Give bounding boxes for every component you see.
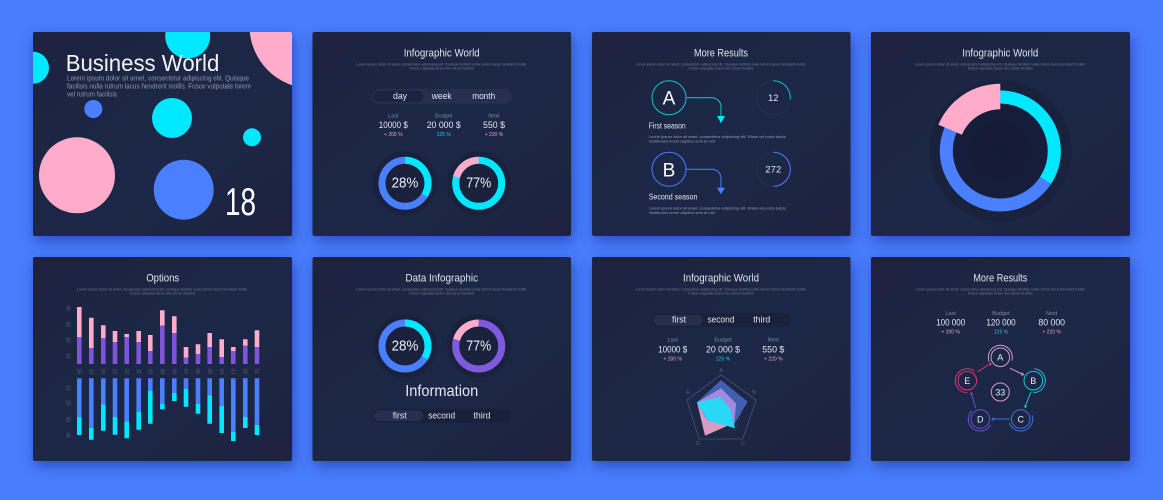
second season text: Lorem ipsum dolor sit amet, consectetur adipiscing elit. Etiam vel porta turpis. bbox=[649, 205, 787, 210]
heading: Infographic World bbox=[962, 48, 1038, 60]
panel background bbox=[871, 32, 1130, 236]
stat: last: Last bbox=[388, 113, 399, 119]
period tabs: week bbox=[431, 91, 452, 102]
category labels: 07 bbox=[182, 369, 188, 374]
first season text: Lorem ipsum dolor sit amet, consectetur adipiscing elit. Etiam vel porta turpis. bbox=[649, 134, 787, 139]
stat: last: 100 000 bbox=[936, 318, 965, 329]
stat: budget: 20 000 $ bbox=[427, 120, 461, 131]
stat: next: Next bbox=[768, 338, 779, 344]
upper axis labels: 40 bbox=[64, 305, 70, 311]
option tabs: first bbox=[672, 314, 686, 325]
stat: next: + 220 % bbox=[1042, 329, 1061, 335]
gauge 12 bbox=[756, 81, 790, 115]
panel: More Results seasons bbox=[592, 32, 850, 236]
category labels: 11 bbox=[135, 369, 141, 374]
badge A bbox=[652, 81, 686, 115]
first season text: First season bbox=[649, 121, 686, 130]
intro text: Lorem ipsum dolor sit amet, consectetur adipiscing elit. Quisque facilisis nulla rutrum lacus hendrerit mollis. bbox=[356, 61, 527, 66]
upper axis labels: 20 bbox=[64, 337, 70, 343]
upper stacked bars bbox=[79, 307, 257, 364]
lower axis labels bbox=[64, 385, 70, 438]
intro text: Fusce vulputate lorem vel rutrum facilisis bbox=[688, 291, 754, 296]
cycle diagram bbox=[955, 342, 1046, 435]
intro text bbox=[636, 61, 806, 71]
category labels: 14 bbox=[100, 369, 106, 374]
stat: next: + 220 % bbox=[764, 357, 783, 363]
stat: last bbox=[936, 311, 965, 335]
period tabs bbox=[372, 89, 512, 104]
intro text: Lorem ipsum dolor sit amet, consectetur adipiscing elit. Quisque facilisis nulla rutrum lacus hendrerit mollis. bbox=[356, 286, 527, 291]
lower stacked bars bbox=[79, 378, 257, 441]
category labels: 02 bbox=[242, 369, 248, 374]
period tabs: day bbox=[393, 91, 407, 102]
node E: E bbox=[964, 376, 970, 386]
category labels: 01 bbox=[253, 369, 259, 374]
upper axis labels bbox=[64, 305, 70, 359]
stat: budget bbox=[706, 338, 741, 363]
stat: budget: 125 % bbox=[716, 357, 731, 363]
intro text: Lorem ipsum dolor sit amet, consectetur adipiscing elit. Quisque facilisis nulla rutrum lacus hendrerit mollis. bbox=[77, 286, 248, 291]
cover background bbox=[33, 32, 292, 236]
heading: More Results bbox=[694, 48, 748, 60]
badge B: B bbox=[663, 160, 675, 181]
category labels: 13 bbox=[111, 369, 117, 374]
cover description: vel rutrum facilisis bbox=[67, 92, 117, 99]
stat: last bbox=[658, 338, 688, 363]
stat: budget: 20 000 $ bbox=[706, 345, 741, 356]
decorative circles bbox=[33, 32, 292, 220]
intro text: Fusce vulputate lorem vel rutrum facilisis bbox=[968, 291, 1033, 296]
intro text bbox=[77, 286, 248, 296]
intro text: Fusce vulputate lorem vel rutrum facilisis bbox=[968, 66, 1033, 71]
heading: Options bbox=[146, 273, 180, 285]
cover description bbox=[67, 76, 251, 99]
donut 77% bbox=[447, 314, 511, 378]
stat: next: 550 $ bbox=[762, 345, 785, 356]
intro text bbox=[915, 61, 1086, 71]
lower axis labels: 30 bbox=[64, 416, 70, 422]
stat: last: + 200 % bbox=[941, 329, 960, 335]
stat: budget bbox=[427, 113, 461, 138]
panel background bbox=[871, 257, 1130, 461]
stat: last: Last bbox=[945, 311, 956, 317]
radar chart: C bbox=[741, 441, 745, 447]
stat: budget: 120 000 bbox=[986, 318, 1016, 329]
category labels: 08 bbox=[170, 369, 176, 374]
stat: last: + 200 % bbox=[663, 357, 682, 363]
panel background bbox=[312, 257, 571, 461]
donut 28% bbox=[373, 314, 437, 378]
option tabs bbox=[652, 313, 790, 327]
badge B bbox=[652, 152, 686, 186]
lower axis labels: 10 bbox=[64, 385, 70, 391]
panel background bbox=[592, 257, 850, 461]
donut 28%: 28% bbox=[392, 175, 418, 192]
arrow A bbox=[686, 98, 725, 123]
intro text bbox=[915, 286, 1086, 296]
heading: More Results bbox=[973, 273, 1028, 285]
category labels: 05 bbox=[206, 369, 212, 374]
intro text bbox=[636, 286, 806, 296]
large donut chart bbox=[930, 80, 1071, 222]
donut 28% bbox=[373, 151, 437, 215]
stat: budget: Budget bbox=[435, 113, 453, 119]
intro text: Lorem ipsum dolor sit amet, consectetur adipiscing elit. Quisque facilisis nulla rutrum lacus hendrerit mollis. bbox=[636, 61, 806, 66]
panel: More Results cycle bbox=[871, 257, 1130, 461]
radar chart bbox=[686, 368, 756, 447]
stat: budget: 125 % bbox=[437, 132, 451, 138]
radar chart: B bbox=[752, 390, 756, 396]
stat: next: Next bbox=[1046, 311, 1058, 317]
second season text: Vestibulum lorem dapibus sem at null bbox=[649, 210, 715, 215]
option tabs bbox=[373, 409, 511, 423]
option tabs: third bbox=[474, 410, 490, 421]
category labels: 15 bbox=[88, 369, 94, 374]
gauge 272 bbox=[756, 152, 790, 186]
gauge 272: 272 bbox=[765, 165, 781, 176]
intro text: Fusce vulputate lorem vel rutrum facilisis bbox=[130, 291, 195, 296]
category labels: 12 bbox=[123, 369, 129, 374]
upper axis labels: 10 bbox=[64, 353, 70, 359]
lower axis labels: 40 bbox=[64, 432, 70, 438]
stat: next bbox=[762, 338, 785, 363]
cover description: Lorem ipsum dolor sit amet, consectetur adipiscing elit. Quisque bbox=[67, 76, 249, 83]
category labels: 04 bbox=[218, 369, 224, 374]
category labels bbox=[76, 369, 259, 374]
arrows between nodes bbox=[970, 363, 1031, 421]
intro text: Lorem ipsum dolor sit amet, consectetur adipiscing elit. Quisque facilisis nulla rutrum lacus hendrerit mollis. bbox=[636, 286, 806, 291]
panel background bbox=[33, 257, 292, 461]
node A: A bbox=[997, 352, 1003, 362]
panel: radar chart bbox=[592, 257, 850, 461]
category labels: 16 bbox=[76, 369, 82, 374]
stat: next bbox=[483, 113, 506, 138]
category labels: 09 bbox=[158, 369, 164, 374]
option tabs: second bbox=[428, 410, 455, 421]
donut 77%: 77% bbox=[466, 175, 491, 192]
gauge 12: 12 bbox=[768, 93, 779, 104]
panel background bbox=[592, 32, 850, 236]
second season text bbox=[649, 193, 787, 215]
stat: last: 10000 $ bbox=[379, 120, 408, 131]
year number: 18 bbox=[225, 181, 256, 224]
category labels: 03 bbox=[230, 369, 236, 374]
panel: Business World cover bbox=[28, 30, 301, 248]
stat: next: 550 $ bbox=[483, 120, 506, 131]
panel: Infographic World donuts bbox=[312, 32, 571, 236]
stat: budget: Budget bbox=[714, 338, 732, 344]
intro text bbox=[356, 61, 527, 71]
intro text: Fusce vulputate lorem vel rutrum facilisis bbox=[409, 291, 474, 296]
stat: budget: Budget bbox=[992, 311, 1010, 317]
panel: Data Infographic bbox=[312, 257, 571, 461]
stat: last: Last bbox=[667, 338, 678, 344]
intro text: Fusce vulputate lorem vel rutrum facilisis bbox=[688, 66, 754, 71]
heading: Data Infographic bbox=[405, 273, 478, 285]
period tabs: month bbox=[472, 91, 495, 102]
panel background bbox=[312, 32, 571, 236]
stat: budget bbox=[986, 311, 1016, 335]
radar chart: A bbox=[719, 368, 723, 374]
node C: C bbox=[1017, 414, 1024, 424]
stat: budget: 125 % bbox=[994, 329, 1009, 335]
category labels: 06 bbox=[194, 369, 200, 374]
stat: next: 80 000 bbox=[1038, 318, 1065, 329]
badge A: A bbox=[663, 89, 676, 110]
donut 77% bbox=[447, 151, 511, 215]
upper axis labels: 30 bbox=[64, 321, 70, 327]
stat: next: + 220 % bbox=[485, 132, 504, 138]
intro text: Lorem ipsum dolor sit amet, consectetur adipiscing elit. Quisque facilisis nulla rutrum lacus hendrerit mollis. bbox=[915, 286, 1086, 291]
intro text: Lorem ipsum dolor sit amet, consectetur adipiscing elit. Quisque facilisis nulla rutrum lacus hendrerit mollis. bbox=[915, 61, 1086, 66]
lower axis labels: 20 bbox=[64, 400, 70, 406]
option tabs: third bbox=[753, 314, 770, 325]
first season text bbox=[649, 121, 787, 144]
option tabs: first bbox=[393, 410, 407, 421]
heading: Infographic World bbox=[683, 273, 759, 285]
node D: D bbox=[977, 414, 984, 424]
information heading: Information bbox=[405, 383, 478, 400]
heading: Infographic World bbox=[404, 48, 480, 60]
second season text: Second season bbox=[649, 193, 697, 202]
cover description: facilisis nulla rutrum lacus hendrerit mollis. Fusce vulputate lorem bbox=[67, 84, 251, 91]
intro text bbox=[356, 286, 527, 296]
donut 28%: 28% bbox=[392, 337, 418, 354]
first season text: Vestibulum lorem dapibus sem at null bbox=[649, 139, 715, 144]
stat: last: 10000 $ bbox=[658, 345, 688, 356]
category labels: 10 bbox=[146, 369, 152, 374]
option tabs: second bbox=[708, 314, 734, 325]
panel: Options bar chart bbox=[33, 257, 292, 461]
cover title: Business World bbox=[66, 50, 219, 76]
stat: next bbox=[1038, 311, 1065, 335]
panel: large donut bbox=[871, 32, 1130, 236]
center value: 33 bbox=[995, 387, 1005, 397]
stat: next: Next bbox=[488, 113, 500, 119]
node B: B bbox=[1030, 376, 1036, 386]
stat: last: + 200 % bbox=[384, 132, 403, 138]
radar chart: E bbox=[686, 390, 690, 396]
stat: last bbox=[379, 113, 408, 138]
intro text: Fusce vulputate lorem vel rutrum facilisis bbox=[409, 66, 474, 71]
arrow B bbox=[686, 169, 725, 194]
radar chart: D bbox=[696, 441, 700, 447]
donut 77%: 77% bbox=[466, 337, 491, 354]
